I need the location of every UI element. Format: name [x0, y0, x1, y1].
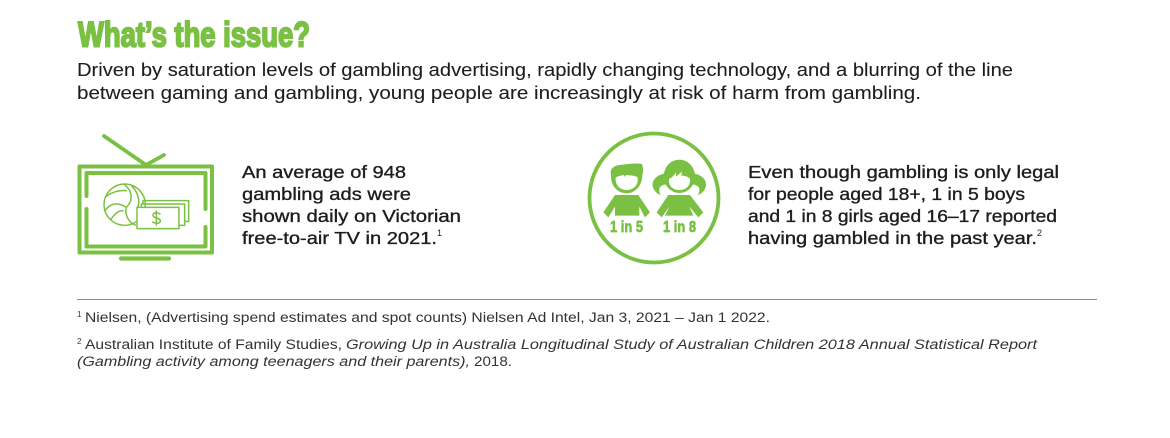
icon: boy and girl in circle — [590, 134, 718, 262]
stat: gambling ads: gambling ads were — [242, 184, 411, 204]
stat: underage gambling: Even though gambling is only legal — [748, 162, 1059, 182]
intro text: between gaming and gambling, young people are increasingly at risk of harm from gambling. — [77, 83, 921, 103]
stat: underage gambling: for people aged 18+, 1 in 5 boys — [748, 184, 1025, 204]
stat: underage gambling: having gambled in the past year. — [748, 228, 1037, 248]
footnote 2 — [77, 337, 1038, 369]
footnote 2: Australian Institute of Family Studies, — [85, 337, 342, 352]
girl — [653, 160, 706, 217]
intro text: Driven by saturation levels of gambling advertising, rapidly changing technology, and a blurring of the line — [77, 60, 1013, 80]
footnote 2: (Gambling activity among teenagers and their parents), — [77, 354, 470, 369]
icon: television with ball and money — [80, 136, 212, 258]
stat: underage gambling — [748, 162, 1059, 248]
footnote 2: Growing Up in Australia Longitudinal Study of Australian Children 2018 Annual Statistical Report — [346, 337, 1038, 352]
boy — [603, 163, 650, 217]
stat: gambling ads: shown daily on Victorian — [242, 206, 461, 226]
icon labels: 1 in 5 — [610, 219, 643, 236]
stat: gambling ads: 1 — [437, 228, 442, 238]
stat: underage gambling: 2 — [1037, 228, 1042, 238]
stat: gambling ads: free-to-air TV in 2021. — [242, 228, 437, 248]
footnote 2: 2018. — [474, 354, 512, 369]
icon labels: 1 in 8 — [663, 219, 696, 236]
footnote 1: 1 — [77, 310, 82, 319]
stat: gambling ads — [242, 162, 461, 248]
stat: underage gambling: and 1 in 8 girls aged 16–17 reported — [748, 206, 1057, 226]
title: What’s the issue? — [78, 16, 310, 54]
divider — [77, 298, 1097, 300]
icon labels — [610, 219, 696, 236]
footnote 2: 2 — [77, 337, 82, 346]
stat: gambling ads: An average of 948 — [242, 162, 406, 182]
footnote 1: Nielsen, (Advertising spend estimates and spot counts) Nielsen Ad Intel, Jan 3, 2021 – Jan 1 2022. — [85, 310, 770, 325]
intro text — [77, 60, 1013, 103]
